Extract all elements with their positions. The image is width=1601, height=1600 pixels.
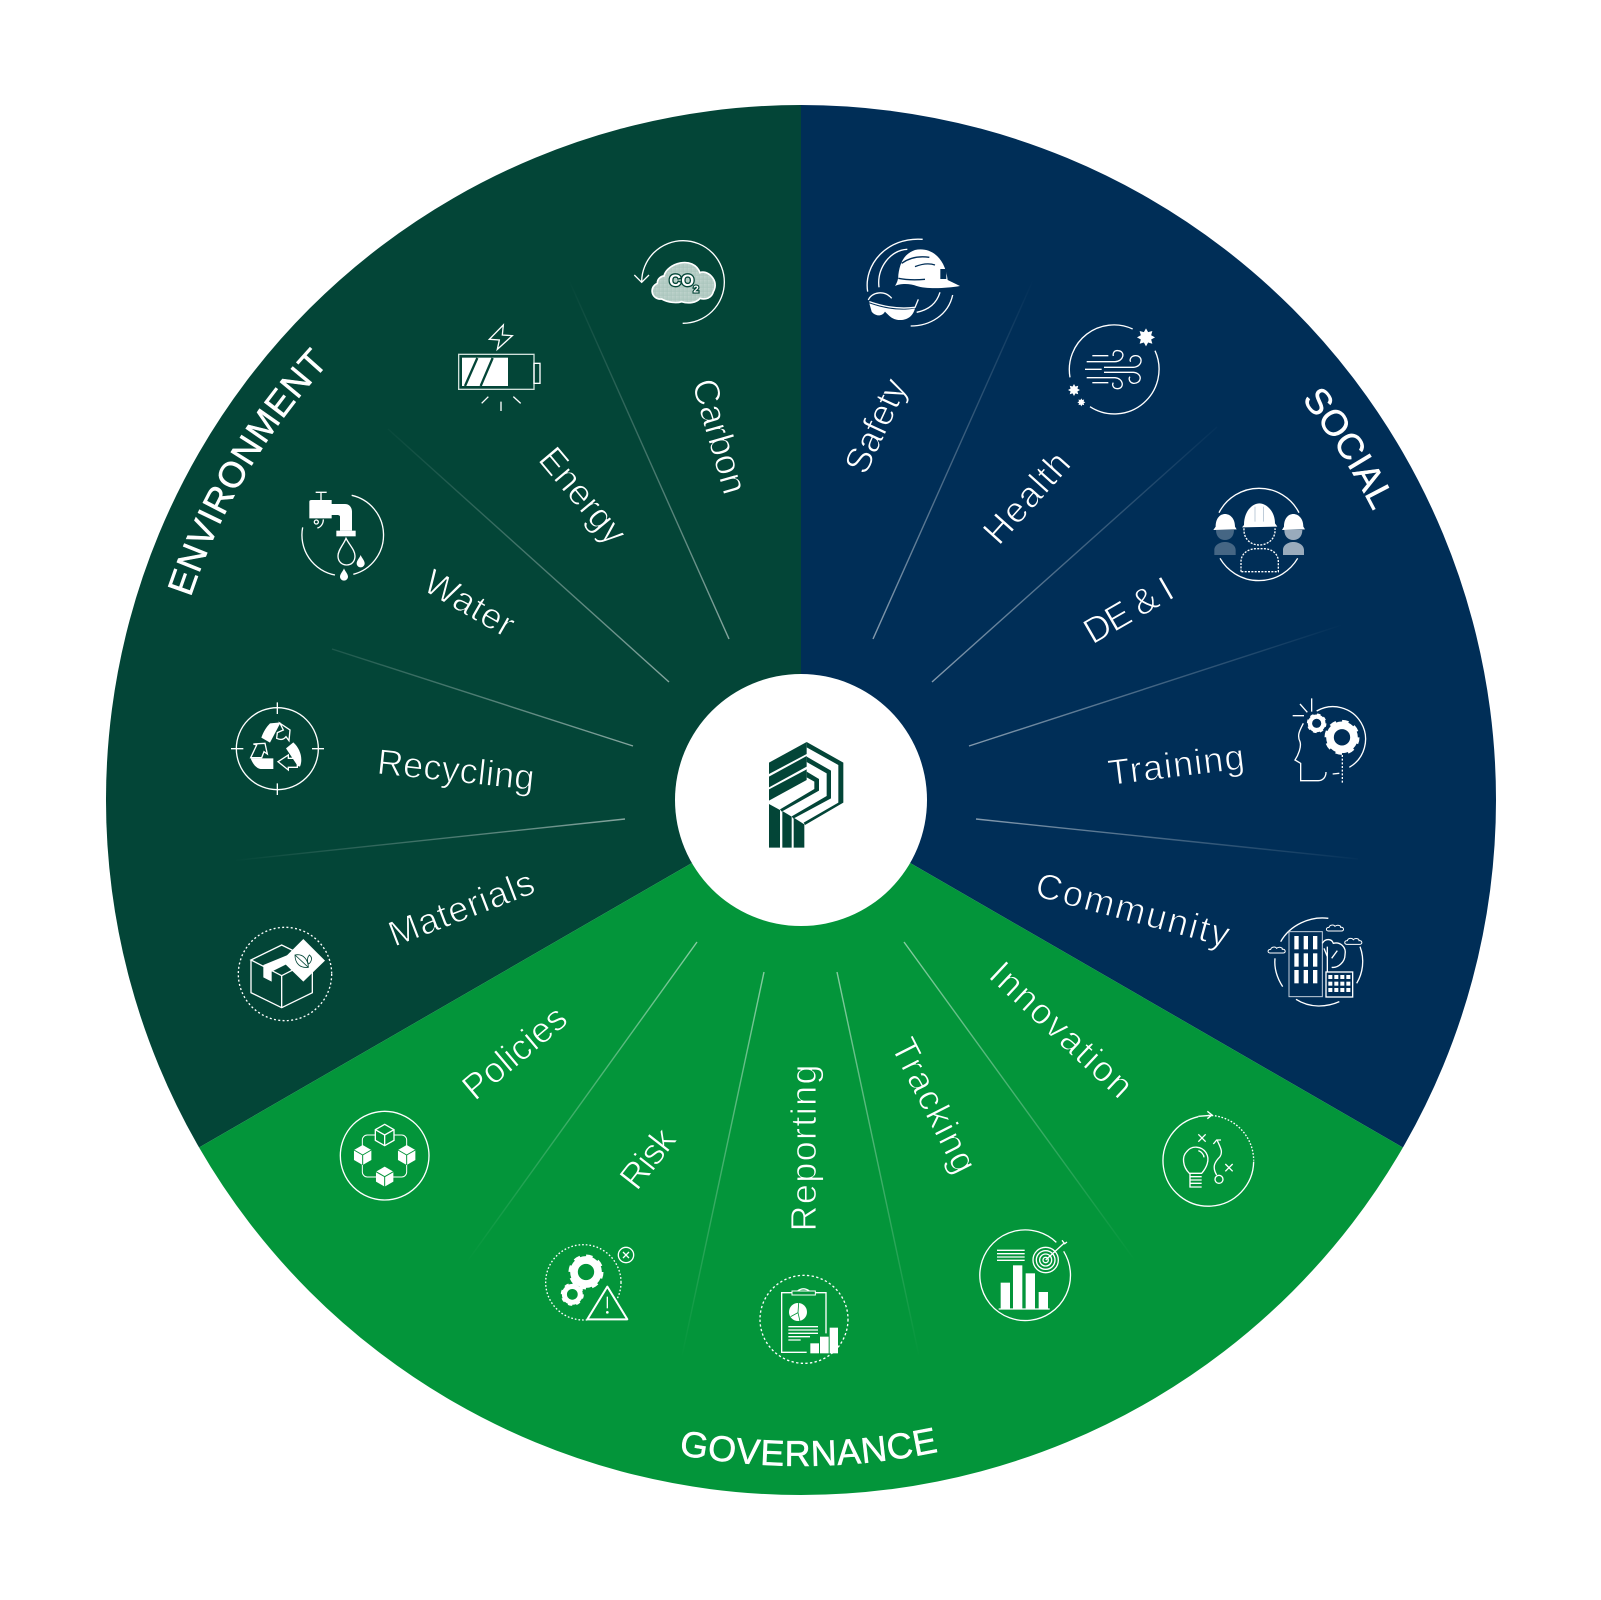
label: materials: Materials — [382, 861, 540, 955]
label: safety: Safety — [836, 372, 915, 480]
panel: environment — [106, 105, 801, 1148]
heading: social: SOCIAL — [1305, 388, 1390, 510]
icon: water tap — [302, 492, 384, 581]
icon: carbon cloud: CO — [669, 271, 694, 290]
icon: carbon cloud — [634, 241, 724, 323]
label: policies: Policies — [454, 997, 575, 1108]
label: tracking: Tracking — [883, 1031, 986, 1180]
icon: carbon cloud: 2 — [693, 285, 699, 296]
icon: recycling — [231, 702, 324, 795]
label: health: Health — [974, 443, 1078, 552]
logo — [769, 742, 843, 848]
icon: innovation bulb and path — [1163, 1111, 1254, 1206]
label: recycling: Recycling — [375, 741, 537, 798]
center circle — [675, 674, 927, 926]
label: innovation: Innovation — [981, 953, 1142, 1106]
label: DE and I: DE & I — [1076, 568, 1181, 652]
label: community: Community — [1031, 864, 1234, 955]
label: carbon: Carbon — [684, 374, 756, 499]
icon: health air — [1068, 325, 1159, 414]
heading: environment: ENVIRONMENT — [168, 346, 323, 595]
icon: reporting clipboard — [760, 1275, 848, 1363]
icon: workers group — [1213, 488, 1305, 581]
label: training: Training — [1106, 736, 1247, 793]
icon: materials box — [238, 927, 332, 1021]
icon: risk gears and warning — [546, 1245, 634, 1320]
sector: social — [801, 105, 1496, 1148]
icon: community buildings — [1268, 918, 1363, 1006]
divider lines: environment — [230, 278, 729, 861]
divider lines: social — [873, 278, 1358, 859]
label: water: Water — [417, 561, 522, 645]
sector: governance — [199, 800, 1403, 1495]
icon: energy battery — [459, 325, 540, 411]
panel: social — [801, 105, 1496, 1148]
label: energy: Energy — [531, 438, 635, 552]
sector: environment — [106, 105, 801, 1148]
heading: governance: GOVERNANCE — [682, 1428, 938, 1466]
divider lines: governance — [464, 942, 1139, 1356]
label: reporting: Reporting — [783, 1064, 824, 1232]
panel: governance — [199, 863, 1403, 1495]
icon: policies cubes — [340, 1111, 429, 1200]
icon: training head and gears — [1293, 698, 1366, 783]
icon: safety helmet and goggles — [867, 239, 960, 326]
label: risk: Risk — [611, 1119, 684, 1197]
icon: tracking chart and target — [980, 1230, 1070, 1321]
